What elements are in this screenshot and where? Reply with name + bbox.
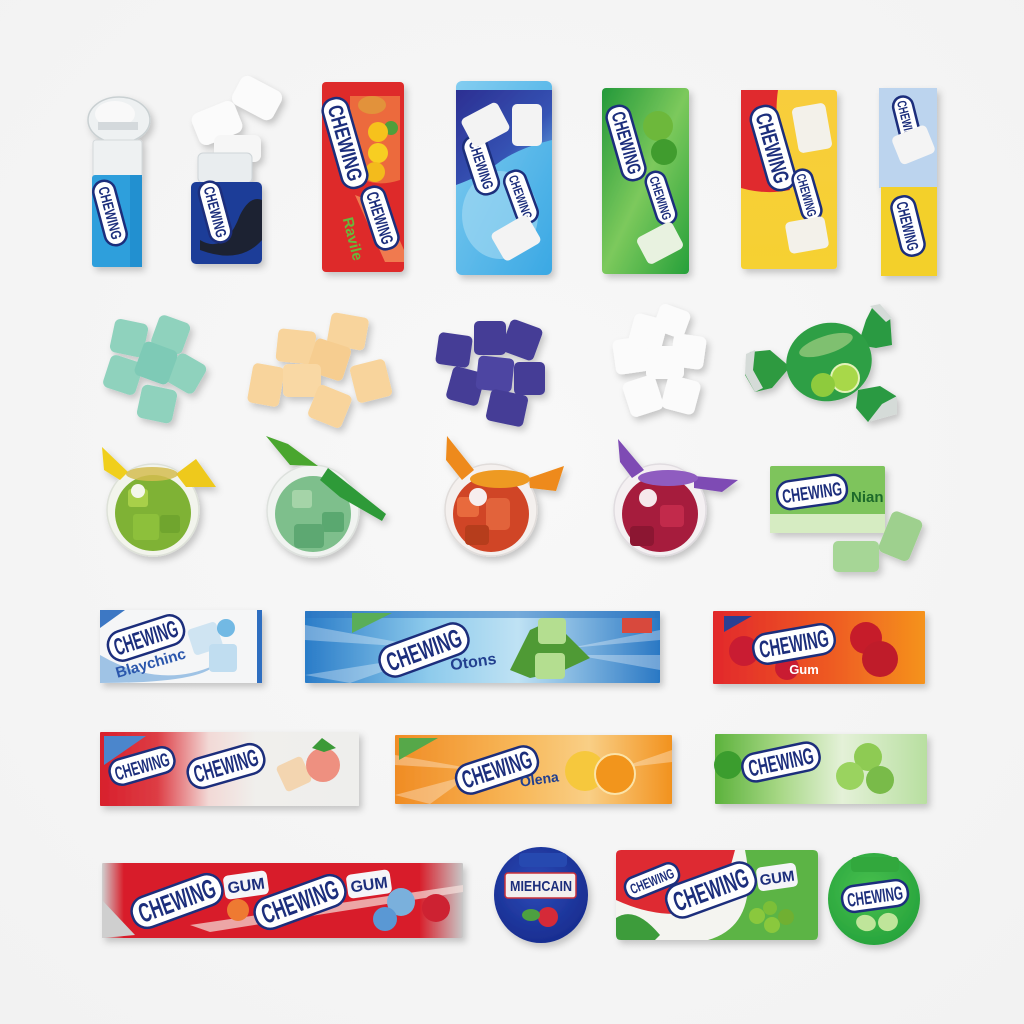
box: red and cream strawberry: CHEWING bbox=[113, 750, 172, 785]
product: yellow and red blister pack: CHEWING bbox=[793, 172, 820, 218]
box: red strawberry: Gum bbox=[789, 662, 819, 677]
product: green blister pack: CHEWING bbox=[646, 174, 675, 222]
green gum box with two gums: CHEWING bbox=[781, 479, 843, 508]
long red bar: chewing gum: CHEWING bbox=[257, 874, 343, 930]
product: blue and yellow pack: CHEWING bbox=[894, 99, 919, 145]
product: clear bottle with blue label: CHEWING bbox=[94, 185, 125, 241]
long red bar: chewing gum: GUM bbox=[227, 875, 266, 898]
gum cluster: purple bbox=[435, 318, 545, 428]
wrapped green candy bbox=[745, 304, 897, 422]
gum ball: red with orange wrapper bbox=[445, 436, 564, 556]
box: red strawberry bbox=[713, 611, 925, 684]
box: red strawberry: CHEWING bbox=[757, 625, 831, 664]
green gum box with two gums bbox=[770, 466, 924, 572]
box: white and blue ice: Blaychinc bbox=[114, 646, 188, 682]
product: red citrus pack: Ravile bbox=[339, 215, 366, 262]
box: long blue mint: Otons bbox=[449, 651, 498, 674]
product: blue blister pack: CHEWING bbox=[506, 173, 535, 221]
long red bar: chewing gum bbox=[102, 863, 463, 938]
rounded pack: red white green: CHEWING bbox=[669, 863, 753, 917]
round tin: navy bbox=[494, 847, 588, 943]
rounded pack: red white green: CHEWING bbox=[628, 865, 676, 897]
box: orange citrus: Olena bbox=[519, 768, 560, 790]
gum cluster: mint bbox=[102, 314, 208, 424]
box: green apple: CHEWING bbox=[746, 742, 816, 782]
round tin: navy: MIEHCAIN bbox=[510, 878, 572, 895]
box: white and blue ice bbox=[100, 610, 262, 683]
gum ball: green with yellow wrapper bbox=[102, 447, 216, 556]
product: green blister pack: CHEWING bbox=[607, 109, 644, 177]
product: open jar with gums: CHEWING bbox=[200, 185, 229, 239]
gum cluster: peach bbox=[247, 312, 393, 429]
rounded pack: red white green bbox=[616, 850, 818, 940]
product: yellow and red blister pack bbox=[741, 90, 837, 269]
product: blue and yellow pack bbox=[879, 88, 937, 276]
box: orange citrus: CHEWING bbox=[458, 746, 536, 794]
product: yellow and red blister pack: CHEWING bbox=[751, 110, 794, 186]
product: red citrus pack: CHEWING bbox=[362, 190, 397, 247]
long red bar: chewing gum: GUM bbox=[350, 874, 389, 897]
product: blue blister pack bbox=[456, 81, 552, 275]
gum ball: dark red with purple wrapper bbox=[614, 439, 738, 556]
gum ball: mint green with green wrapper bbox=[266, 436, 386, 557]
product: clear bottle with blue label bbox=[88, 97, 150, 267]
product: open jar with gums bbox=[189, 73, 285, 264]
product: red citrus pack: CHEWING bbox=[323, 102, 366, 184]
box: orange citrus bbox=[395, 735, 672, 804]
long red bar: chewing gum: CHEWING bbox=[134, 873, 220, 929]
round tin: green bbox=[828, 853, 920, 945]
round tin: green: CHEWING bbox=[846, 883, 904, 912]
box: green apple bbox=[714, 734, 927, 804]
box: long blue mint: CHEWING bbox=[382, 623, 466, 677]
gum cluster: white bbox=[612, 302, 707, 418]
box: red and cream strawberry bbox=[100, 732, 359, 806]
product: blue and yellow pack: CHEWING bbox=[892, 200, 921, 253]
product: blue blister pack: CHEWING bbox=[465, 139, 496, 192]
product: green blister pack bbox=[602, 88, 689, 274]
box: long blue mint bbox=[305, 611, 660, 683]
green gum box with two gums: Nian bbox=[851, 489, 884, 506]
box: red and cream strawberry: CHEWING bbox=[191, 744, 262, 789]
box: white and blue ice: CHEWING bbox=[111, 615, 182, 662]
rounded pack: red white green: GUM bbox=[759, 868, 796, 889]
product: red citrus pack bbox=[320, 82, 404, 272]
